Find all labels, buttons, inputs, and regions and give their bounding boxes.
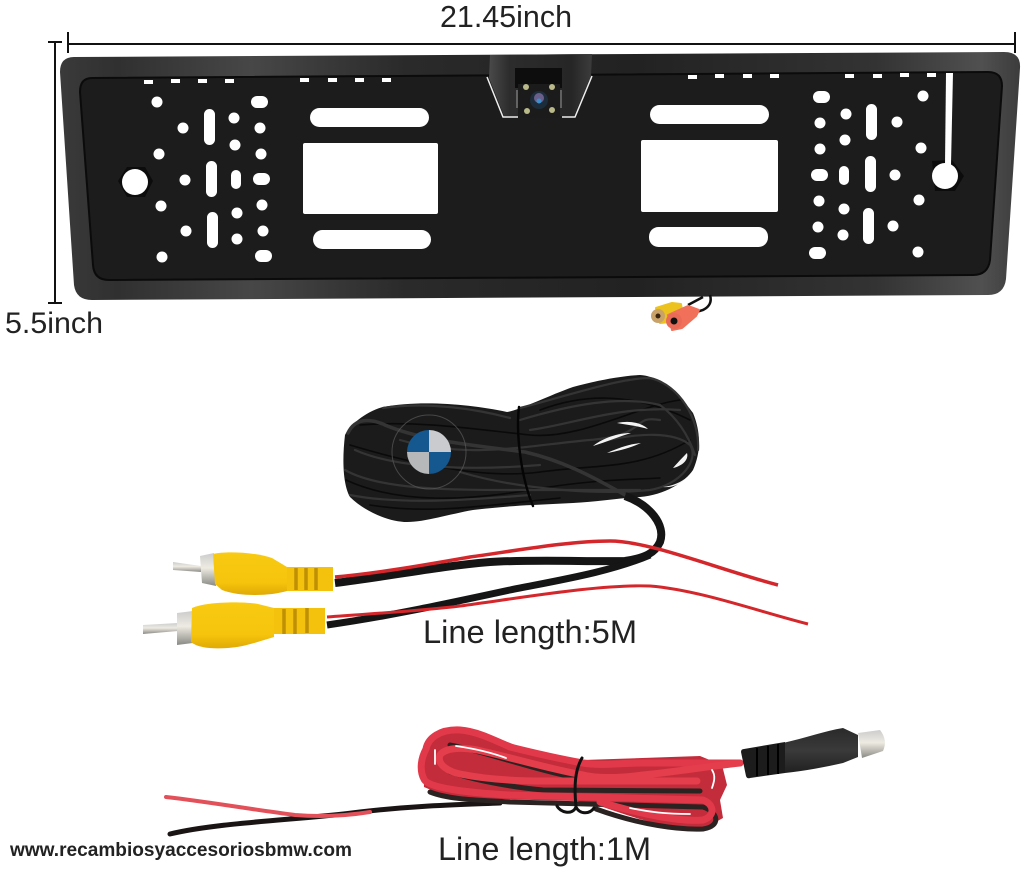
coil shadows — [346, 398, 690, 509]
right hole pattern — [809, 90, 928, 259]
red tail — [166, 797, 370, 816]
main black cable — [335, 496, 661, 583]
gaps in coil — [593, 422, 687, 487]
coiled black cable bundle — [343, 375, 699, 522]
coil mass — [423, 732, 727, 829]
left mounting hole — [118, 167, 153, 197]
dc power plug — [741, 728, 885, 778]
top ventilation slots — [144, 73, 936, 84]
black tail — [170, 803, 500, 834]
upper yellow rca plug — [173, 552, 333, 595]
upper plug strain relief — [287, 567, 333, 591]
width label: 21.45inch — [440, 0, 572, 34]
left hole pattern — [152, 96, 272, 262]
height dimension line — [48, 42, 62, 303]
lower yellow rca plug — [143, 602, 325, 648]
plate holes — [118, 73, 964, 262]
lower plug strain relief — [274, 608, 325, 634]
red and black power cable coil — [166, 730, 740, 834]
gaps in coil — [435, 746, 714, 814]
right mounting hole with slit — [932, 73, 964, 191]
cable tie — [557, 758, 594, 813]
inner plate — [80, 72, 1002, 280]
red inner strand — [439, 748, 740, 781]
coil mass — [343, 375, 699, 522]
width dimension line — [68, 32, 1015, 53]
height label: 5.5inch — [5, 307, 103, 340]
bmw watermark logo — [392, 415, 466, 489]
black and red lead of the 5M cable — [327, 496, 808, 625]
left window and slots — [303, 108, 438, 249]
cable tie — [518, 407, 533, 506]
outer frame — [60, 52, 1020, 300]
label: 1M line length: Line length:1M — [438, 831, 651, 867]
coil strands — [345, 378, 698, 501]
small rca connectors below plate — [651, 295, 711, 330]
licence plate frame with camera — [60, 52, 1020, 300]
camera lens — [530, 91, 548, 109]
red outer strand — [421, 730, 740, 820]
camera leds — [523, 84, 555, 114]
right window and slots — [641, 105, 778, 247]
label: 5M line length: Line length:5M — [423, 614, 637, 650]
lower red wire — [327, 586, 808, 624]
upper red wire — [335, 541, 778, 585]
camera housing — [487, 54, 592, 118]
website watermark: www.recambiosyaccesoriosbmw.com — [9, 840, 352, 861]
black underside strands — [430, 745, 716, 829]
